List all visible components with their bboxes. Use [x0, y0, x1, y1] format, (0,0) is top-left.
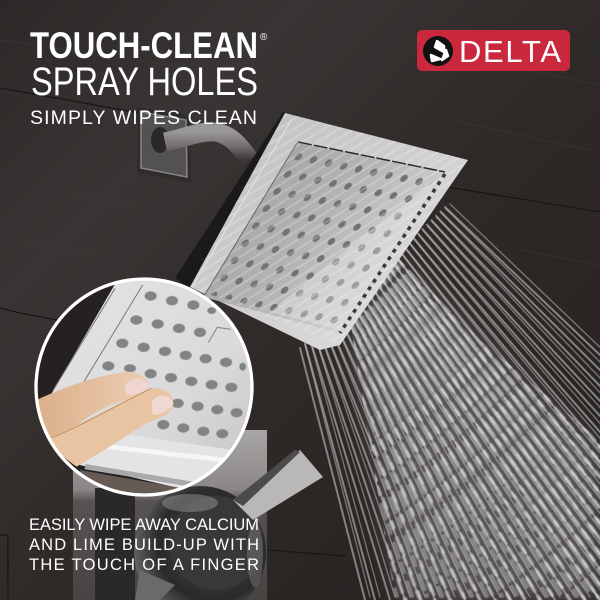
dark slot edges: [298, 142, 445, 172]
logo emblem: [423, 36, 453, 66]
shower arm: [165, 132, 250, 160]
inset lower dark edge: [80, 470, 178, 494]
spray holes: [210, 153, 433, 324]
inset diverter outline: [208, 327, 231, 343]
inset lower band: [80, 435, 233, 490]
inset holes: [102, 291, 246, 438]
inner spray face: [203, 143, 445, 333]
title block: [30, 25, 268, 129]
inset back finger: [38, 372, 148, 438]
shower arm wall flange: [137, 107, 191, 183]
bright reflection: [270, 178, 440, 330]
inset front finger: [48, 388, 173, 467]
subtitle: SIMPLY WIPES CLEAN: [30, 107, 257, 129]
valve trim plate: [73, 430, 267, 600]
registered mark: ®: [260, 32, 268, 43]
logo wordmark: DELTA: [459, 34, 561, 69]
finger gap shadow: [52, 388, 152, 438]
caption line 3: THE TOUCH OF A FINGER: [29, 556, 259, 574]
chrome frame: [190, 113, 468, 350]
valve knob: [95, 486, 266, 600]
inset white ring: [36, 279, 252, 495]
reflected streaks: [190, 113, 468, 345]
dark side of shower head: [175, 112, 295, 290]
inset backdrop: [38, 285, 174, 487]
inset shower plate: [52, 280, 250, 466]
shower head: [175, 112, 468, 350]
fingernail: [152, 396, 173, 415]
bottom caption: [29, 516, 259, 574]
title line: Spray Holes: SPRAY HOLES: [31, 60, 258, 104]
caption line 1: EASILY WIPE AWAY CALCIUM: [29, 516, 259, 534]
caption line 2: AND LIME BUILD-UP WITH: [29, 536, 259, 554]
fingernails: [125, 379, 148, 395]
water spray: [300, 203, 600, 600]
title line: Touch-Clean: TOUCH-CLEAN: [30, 25, 258, 66]
magnified inset circle: [33, 277, 260, 503]
Delta logo badge: [417, 30, 570, 71]
inset bevel lines: [53, 285, 143, 390]
valve lever handle: [233, 450, 323, 520]
